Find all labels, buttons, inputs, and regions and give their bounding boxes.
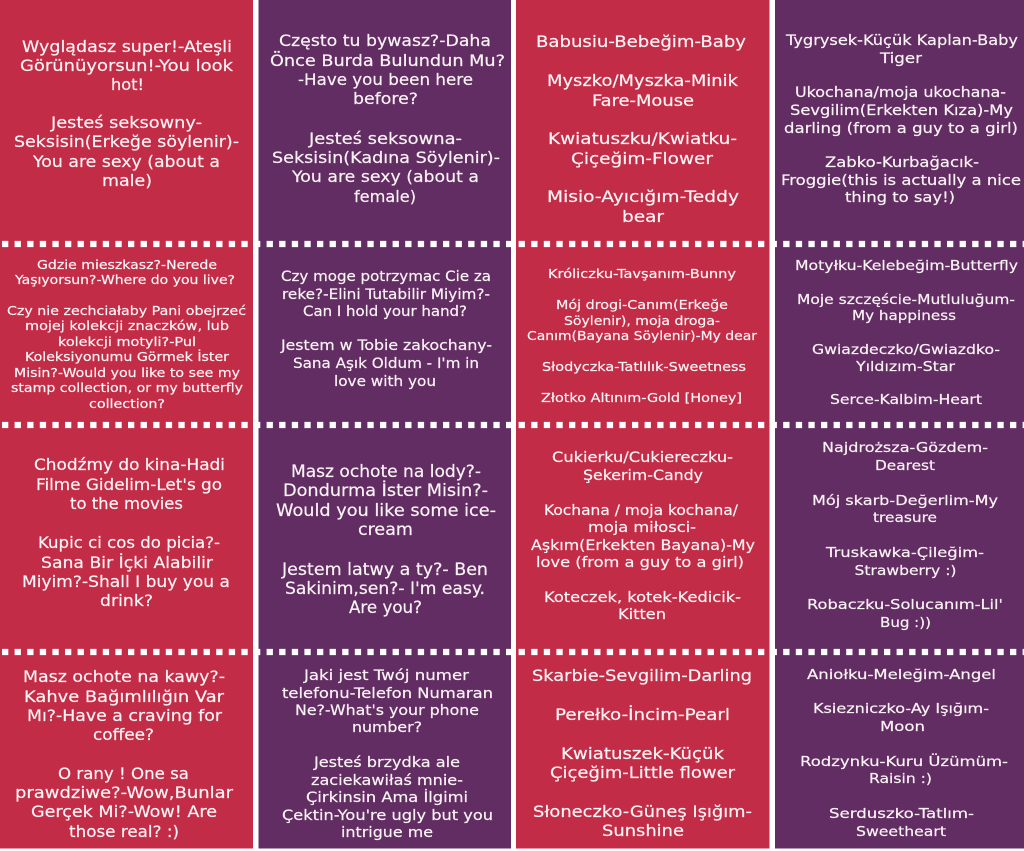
text block: row 3 column 2: Jestem latwy a ty?- Ben	[281, 560, 488, 579]
text block: row 2 column 3: Króliczku-Tavşanım-Bunny	[548, 266, 737, 281]
text block: row 2 column 3: Söylenir), moja droga-	[564, 313, 720, 328]
column: purple right	[775, 0, 1024, 848]
text block: row 2 column 2: Can I hold your hand?	[303, 304, 467, 320]
text block: row 3 column 4: Strawberry :)	[854, 563, 956, 579]
text block: row 3 column 1: Sana Bir İçki Alabilir	[41, 553, 213, 572]
text block: row 1 column 1: male)	[102, 171, 152, 190]
text block: row 1 column 3: Kwiatuszku/Kwiatku-	[548, 129, 737, 148]
text block: row 3 column 3: love (from a guy to a girl)	[536, 555, 744, 571]
text block: row 4 column 4: Moon	[880, 719, 925, 735]
text block: row 3 column 4: Mój skarb-Değerlim-My	[812, 493, 998, 509]
text block: row 2 column 1: Koleksiyonumu Görmek İster	[25, 349, 229, 364]
text block: row 1 column 4: Sevgilim(Erkekten Kıza)-My	[790, 103, 1013, 119]
perforated dashes between rows	[2, 244, 1024, 652]
text block: row 1 column 3	[536, 32, 746, 226]
text block: row 2 column 3: Mój drogi-Canım(Erkeğe	[556, 297, 728, 312]
text block: row 3 column 2: Masz ochote na lody?-	[291, 462, 481, 481]
text block: row 3 column 3: moja miłosci-	[588, 520, 696, 536]
text block: row 1 column 3: Misio-Ayıcığım-Teddy	[547, 187, 739, 206]
text block: row 3 column 4: Truskawka-Çileğim-	[825, 545, 984, 561]
text block: row 1 column 1: Jesteś seksowny-	[50, 113, 202, 132]
text block: row 2 column 1: Misin?-Would you like to see my	[14, 366, 240, 380]
text block: row 2 column 1: kolekcji motyli?-Pul	[58, 335, 196, 349]
text block: row 1 column 3: Myszko/Myszka-Minik	[547, 71, 739, 90]
text block: row 3 column 4: Najdroższa-Gözdem-	[822, 440, 988, 456]
text block: row 2 column 1: Gdzie mieszkasz?-Nerede	[37, 258, 217, 272]
text block: row 4 column 1: Mı?-Have a craving for	[27, 706, 222, 725]
text block: row 3 column 3: Şekerim-Candy	[583, 468, 703, 484]
text block: row 4 column 1	[15, 667, 233, 841]
text block: row 3 column 2: Would you like some ice-	[276, 501, 496, 520]
text block: row 3 column 1: Miyim?-Shall I buy you a	[22, 572, 230, 591]
text block: row 4 column 2: number?	[352, 720, 422, 736]
text block: row 4 column 4: Raisin :)	[869, 771, 932, 787]
text block: row 2 column 2	[280, 269, 492, 390]
text block: row 3 column 4: Bug :))	[880, 615, 931, 631]
text block: row 3 column 1	[22, 455, 230, 610]
text block: row 3 column 3: Cukierku/Cukiereczku-	[552, 450, 733, 466]
text block: row 1 column 3: Çiçeğim-Flower	[571, 149, 713, 168]
text block: row 1 column 3: bear	[622, 207, 664, 226]
text block: row 2 column 3	[527, 266, 758, 405]
text block: row 1 column 4: Tiger	[879, 51, 922, 67]
text block: row 2 column 4: Yıldızım-Star	[855, 359, 956, 375]
text block: row 4 column 1: Kahve Bağımlılığın Var	[24, 687, 224, 706]
text block: row 1 column 1: Wyglądasz super!-Ateşli	[22, 37, 232, 56]
text block: row 4 column 2: Jesteś brzydka ale	[313, 755, 460, 771]
text block: row 2 column 1: Czy nie zechciałaby Pani obejrzeć	[7, 304, 246, 318]
text block: row 4 column 4: Sweetheart	[856, 824, 946, 840]
column: red left	[0, 0, 253, 848]
text block: row 3 column 2	[276, 462, 496, 617]
text block: row 4 column 3: Perełko-İncim-Pearl	[555, 705, 730, 724]
text block: row 1 column 1: Görünüyorsun!-You look	[20, 56, 234, 75]
text block: row 4 column 4: Ksiezniczko-Ay Işığım-	[813, 701, 989, 717]
text block: row 4 column 1: Masz ochote na kawy?-	[23, 667, 225, 686]
text block: row 4 column 1: those real? :)	[69, 822, 179, 841]
text block: row 4 column 2: Çektin-You're ugly but you	[282, 808, 493, 824]
text block: row 3 column 1: Filme Gidelim-Let's go	[36, 475, 222, 494]
text block: row 3 column 4: treasure	[873, 510, 937, 526]
text block: row 3 column 2: Dondurma İster Misin?-	[283, 481, 488, 500]
text block: row 2 column 1: Yaşıyorsun?-Where do you live?	[14, 273, 235, 287]
text block: row 2 column 4: Gwiazdeczko/Gwiazdko-	[812, 342, 1000, 358]
column: purple second	[258, 0, 511, 848]
text block: row 1 column 1: Seksisin(Erkeğe söylenir)-	[14, 132, 239, 151]
text block: row 1 column 3: Fare-Mouse	[592, 91, 694, 110]
text block: row 1 column 4: Froggie(this is actually a nice	[781, 173, 1021, 189]
text block: row 4 column 2: Jaki jest Twój numer	[303, 668, 469, 684]
text block: row 3 column 4: Dearest	[875, 458, 935, 474]
text block: row 2 column 4: Moje szczęście-Mutluluğum-	[797, 292, 1015, 308]
text block: row 4 column 1: prawdziwe?-Wow,Bunlar	[15, 783, 233, 802]
text block: row 4 column 4: Rodzynku-Kuru Üzümüm-	[800, 752, 1008, 770]
text block: row 4 column 1: O rany ! One sa	[58, 764, 189, 783]
text block: row 1 column 1: You are sexy (about a	[32, 152, 220, 171]
text block: row 2 column 2: love with you	[334, 374, 436, 390]
text block: row 2 column 4	[795, 258, 1018, 408]
text block: row 4 column 2: telefonu-Telefon Numaran	[282, 686, 493, 702]
text block: row 3 column 2: cream	[358, 520, 413, 539]
text block: row 2 column 1: stamp collection, or my butterfly	[11, 381, 243, 395]
text block: row 3 column 2: Are you?	[349, 598, 422, 617]
text block: row 3 column 4: Robaczku-Solucanım-Lil'	[807, 597, 1003, 613]
text block: row 2 column 1	[7, 258, 246, 411]
text block: row 1 column 3: Babusiu-Bebeğim-Baby	[536, 32, 746, 51]
text block: row 2 column 4: Serce-Kalbim-Heart	[830, 392, 982, 408]
text block: row 1 column 4: Ukochana/moja ukochana-	[795, 85, 1006, 101]
text block: row 1 column 2: female)	[354, 187, 416, 206]
text block: row 1 column 2: -Have you been here	[298, 70, 473, 89]
text block: row 4 column 2: zaciekawiłaś mnie-	[311, 773, 463, 789]
text block: row 2 column 2: reke?-Elini Tutabilir Miyim?-	[282, 287, 490, 303]
column: red third	[516, 0, 770, 848]
text block: row 3 column 1: Kupic ci cos do picia?-	[38, 533, 220, 552]
text block: row 1 column 1	[14, 37, 239, 190]
text block: row 1 column 4: thing to say!)	[845, 190, 955, 206]
text block: row 4 column 1: coffee?	[93, 725, 154, 744]
text block: row 3 column 1: to the movies	[70, 494, 183, 513]
text block: row 3 column 3	[531, 450, 755, 623]
text block: row 4 column 4: Aniołku-Meleğim-Angel	[807, 667, 996, 683]
text block: row 1 column 4: Tygrysek-Küçük Kaplan-Baby	[785, 33, 1018, 49]
text block: row 4 column 1: Gerçek Mi?-Wow! Are	[31, 802, 217, 821]
text block: row 3 column 3: Koteczek, kotek-Kedicik-	[544, 590, 741, 606]
text block: row 4 column 2: Çirkinsin Ama İlgimi	[306, 788, 468, 806]
text block: row 2 column 2: Czy moge potrzymac Cie za	[281, 269, 491, 285]
text block: row 1 column 4	[781, 33, 1021, 206]
text block: row 4 column 2	[282, 668, 493, 841]
text block: row 3 column 3: Aşkım(Erkekten Bayana)-My	[531, 538, 755, 554]
text block: row 2 column 3: Złotko Altınım-Gold [Honey]	[541, 390, 742, 405]
text block: row 3 column 4	[807, 440, 1003, 631]
text block: row 4 column 3: Skarbie-Sevgilim-Darling	[532, 666, 752, 685]
text block: row 3 column 2: Sakinim,sen?- I'm easy.	[285, 579, 485, 598]
text block: row 2 column 2: Sana Aşık Oldum - I'm in	[293, 356, 479, 372]
text block: row 4 column 3: Sunshine	[602, 821, 684, 840]
text block: row 1 column 2: Jesteś seksowna-	[308, 129, 462, 148]
text block: row 4 column 3: Słoneczko-Güneş Işığım-	[533, 802, 752, 821]
text block: row 3 column 1: drink?	[100, 591, 153, 610]
text block: row 1 column 4: Zabko-Kurbağacık-	[825, 155, 979, 171]
text block: row 4 column 3: Kwiatuszek-Küçük	[561, 744, 725, 763]
text block: row 1 column 2: before?	[353, 89, 418, 108]
text block: row 1 column 2: Często tu bywasz?-Daha	[279, 31, 491, 50]
text block: row 2 column 2: Jestem w Tobie zakochany-	[280, 338, 492, 354]
text block: row 1 column 2: Seksisin(Kadına Söylenir)-	[272, 148, 500, 167]
text block: row 1 column 1: hot!	[111, 75, 144, 94]
text block: row 4 column 2: intrigue me	[341, 825, 433, 841]
text block: row 4 column 3: Çiçeğim-Little flower	[550, 763, 735, 782]
text block: row 1 column 4: darling (from a guy to a girl)	[784, 121, 1018, 137]
text block: row 4 column 4: Serduszko-Tatlım-	[829, 806, 974, 822]
text block: row 1 column 2	[270, 31, 505, 206]
text block: row 4 column 3	[532, 666, 752, 840]
text block: row 1 column 2: Önce Burda Bulundun Mu?	[270, 51, 505, 70]
text block: row 2 column 4: My happiness	[852, 308, 956, 324]
text block: row 3 column 3: Kochana / moja kochana/	[544, 503, 738, 519]
text block: row 2 column 1: mojej kolekcji znaczków, lub	[25, 319, 229, 333]
text block: row 1 column 2: You are sexy (about a	[291, 167, 479, 186]
text block: row 2 column 1: collection?	[89, 397, 165, 411]
text block: row 4 column 2: Ne?-What's your phone	[295, 703, 479, 719]
text block: row 3 column 1: Chodźmy do kina-Hadi	[34, 455, 225, 474]
text block: row 2 column 3: Canım(Bayana Söylenir)-My dear	[527, 328, 758, 343]
text block: row 4 column 4	[800, 667, 1008, 840]
text block: row 3 column 3: Kitten	[618, 607, 666, 623]
text block: row 2 column 4: Motyłku-Kelebeğim-Butterfly	[795, 258, 1018, 274]
text block: row 2 column 3: Słodyczka-Tatlılık-Sweetness	[542, 359, 746, 374]
